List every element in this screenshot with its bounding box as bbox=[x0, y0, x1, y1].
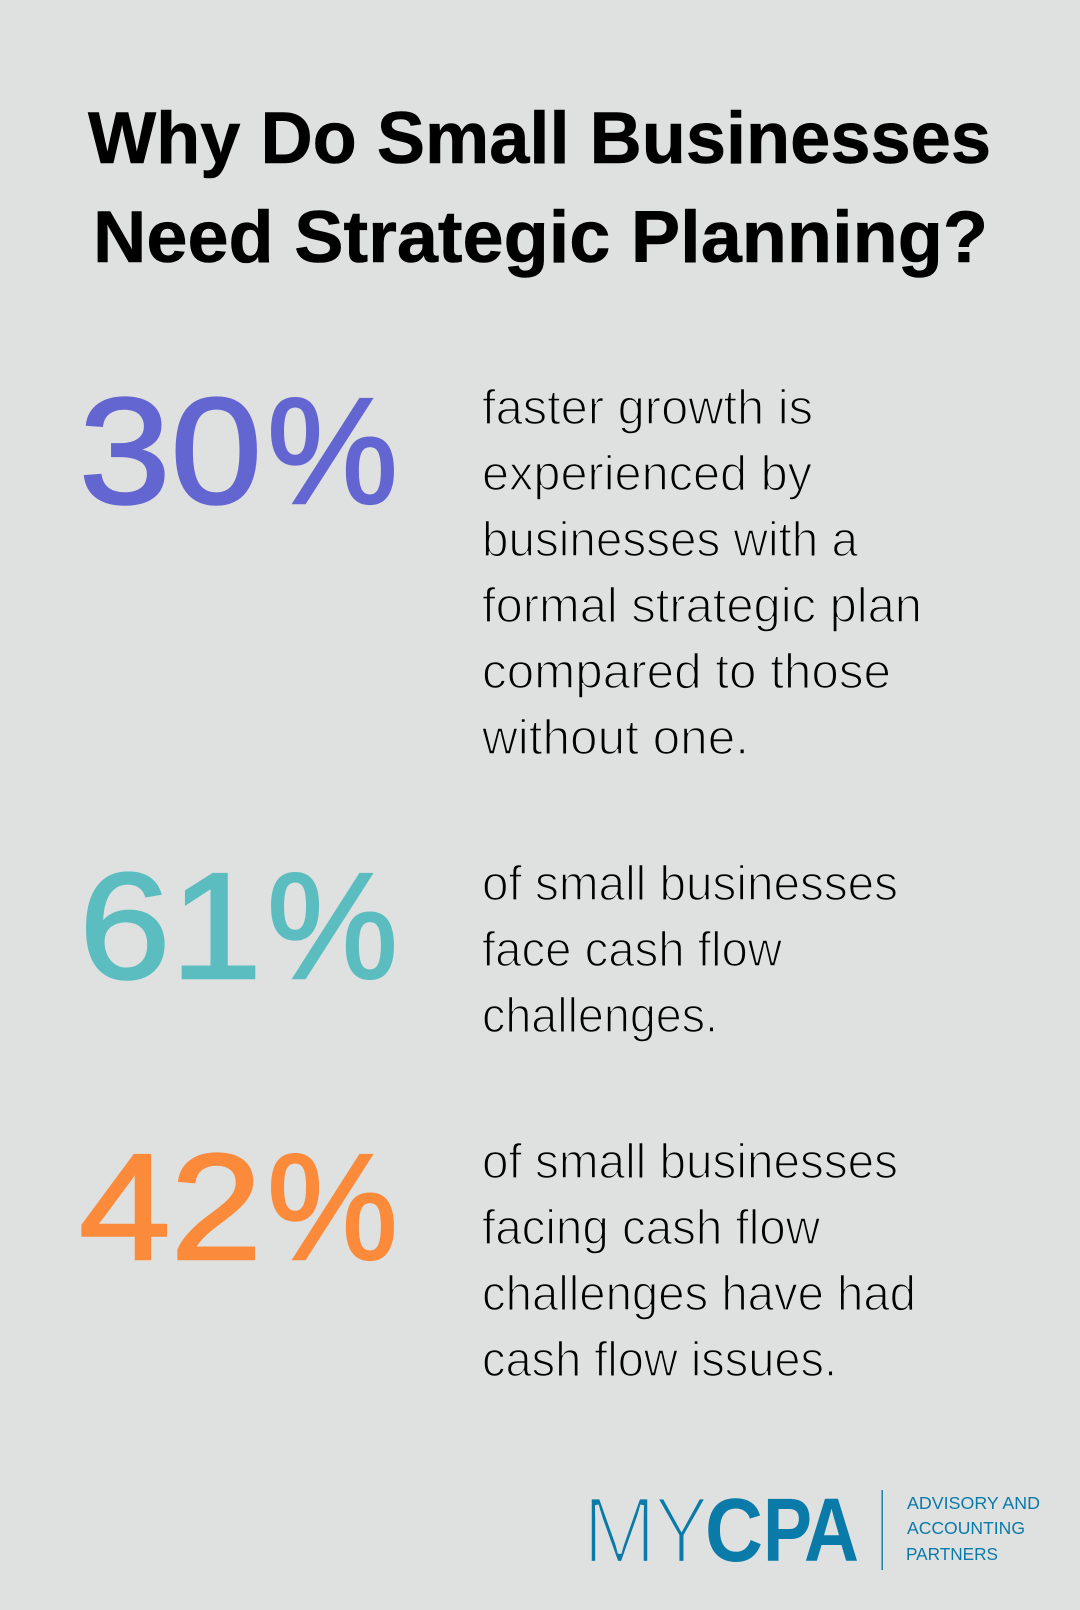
text block: 61% description: face cash flow bbox=[482, 923, 783, 977]
statistic: 61% bbox=[79, 841, 398, 1010]
logo: MYCPA: A bbox=[804, 1481, 859, 1581]
statistic: 42%: 42 bbox=[79, 1122, 262, 1291]
statistic: 42% bbox=[79, 1122, 398, 1291]
text block: 61% description: challenges. bbox=[482, 989, 718, 1043]
text block: 30% description: formal strategic plan bbox=[482, 579, 922, 633]
logo: MYCPA: Y bbox=[654, 1477, 709, 1584]
title bbox=[88, 98, 991, 278]
text block: 61% description bbox=[482, 857, 898, 1043]
text block: 42% description bbox=[482, 1135, 916, 1387]
statistic: 30%: 30 bbox=[79, 366, 262, 535]
logo: MYCPA: ADVISORY AND bbox=[907, 1493, 1040, 1513]
text block: 61% description: of small businesses bbox=[482, 857, 898, 911]
text block: 30% description: experienced by bbox=[482, 447, 812, 501]
logo: MYCPA: M bbox=[582, 1477, 656, 1584]
text block: 30% description: without one. bbox=[481, 711, 749, 765]
logo: MYCPA: C bbox=[705, 1481, 763, 1581]
logo: MYCPA: P bbox=[763, 1481, 812, 1581]
logo: MYCPA: PARTNERS bbox=[906, 1544, 998, 1564]
text block: 42% description: cash flow issues. bbox=[482, 1333, 837, 1387]
text block: 30% description bbox=[481, 381, 922, 765]
statistic: 42%: % bbox=[267, 1122, 398, 1291]
text block: 30% description: compared to those bbox=[482, 645, 891, 699]
text block: 42% description: facing cash flow bbox=[482, 1201, 821, 1255]
text block: 42% description: challenges have had bbox=[482, 1267, 916, 1321]
statistic: 61%: % bbox=[267, 841, 398, 1010]
statistic: 30% bbox=[79, 366, 398, 535]
text block: 42% description: of small businesses bbox=[482, 1135, 898, 1189]
statistic: 61%: 61 bbox=[79, 841, 262, 1010]
title: Need Strategic Planning? bbox=[93, 197, 988, 278]
statistic: 30%: % bbox=[267, 366, 398, 535]
text block: 30% description: faster growth is bbox=[482, 381, 813, 435]
logo: MYCPA: ACCOUNTING bbox=[907, 1518, 1025, 1538]
title: Why Do Small Businesses bbox=[88, 98, 991, 179]
logo: MYCPA bbox=[582, 1477, 1040, 1584]
text block: 30% description: businesses with a bbox=[482, 513, 859, 567]
